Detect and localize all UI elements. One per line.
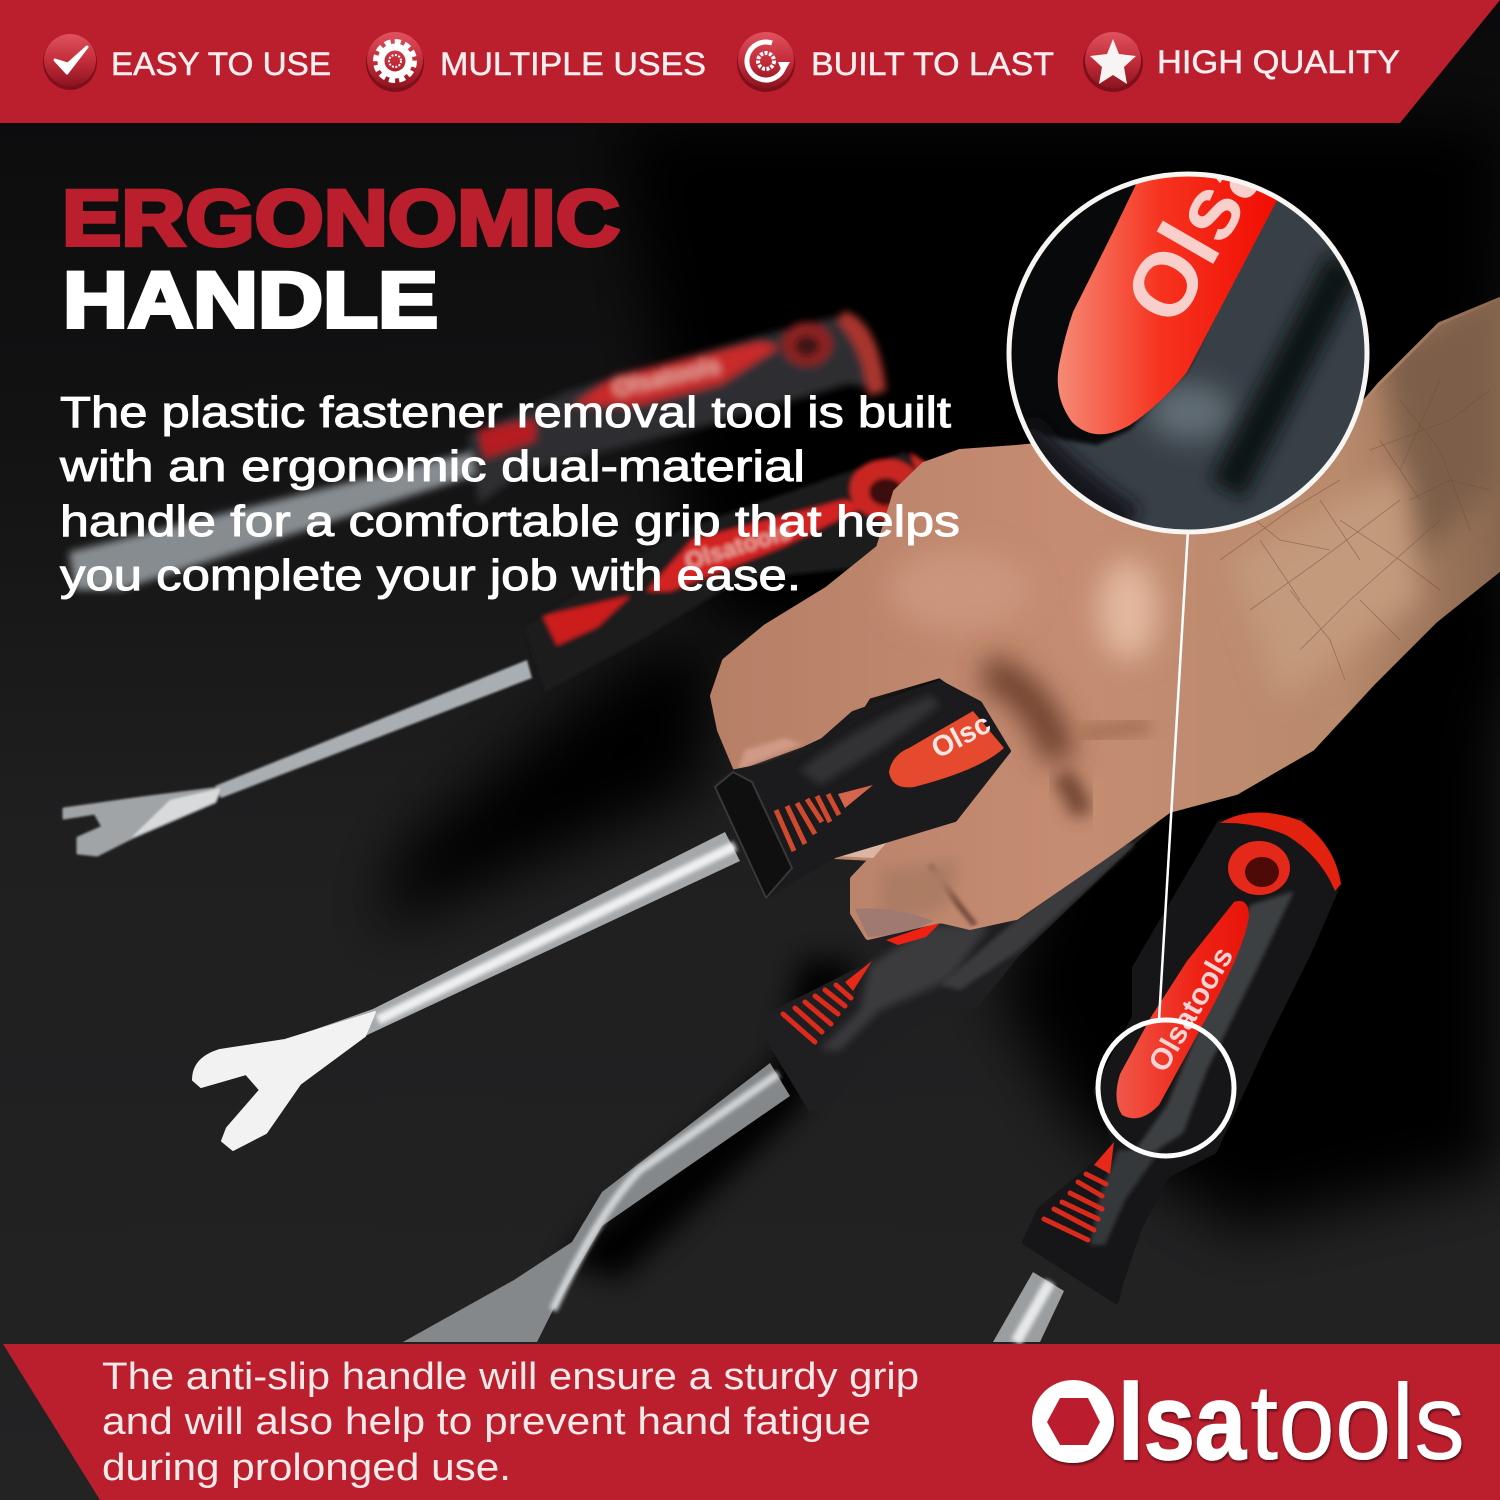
callout small ring: [1098, 1020, 1234, 1156]
body text: with an ergonomic dual-material: [59, 442, 805, 491]
top banner: [0, 0, 1500, 123]
body text: [59, 388, 960, 600]
bottom text: The anti-slip handle will ensure a sturdy grip: [102, 1356, 919, 1398]
hand: [713, 290, 1500, 937]
icon: cycle gear: [737, 32, 795, 92]
grip triangle: [838, 785, 873, 808]
label: built to last: BUILT TO LAST: [811, 46, 1054, 82]
finger tip under handle: [835, 840, 889, 858]
grip ribs: [1044, 1174, 1106, 1240]
blurred tool middle: [64, 452, 935, 855]
grip triangle: [845, 961, 872, 991]
callout magnified grip: [1006, 172, 1370, 534]
icon: star: [1083, 32, 1143, 92]
hanging hole: [1228, 841, 1290, 895]
end dome: [1220, 812, 1341, 891]
callout magnified grip: Olsa: [1106, 120, 1290, 340]
red label oval: [889, 711, 1004, 787]
grip triangle: [1094, 1142, 1114, 1174]
grip ribs: [783, 985, 851, 1042]
tool in hand: [193, 682, 1009, 1150]
blurred tool middle: Olsatools: [682, 518, 794, 576]
icon: gear: [366, 32, 424, 92]
icon: check: [43, 34, 97, 90]
label: multiple uses: MULTIPLE USES: [440, 46, 706, 82]
logo: lsa: [1118, 1361, 1247, 1482]
thumb nail: [855, 908, 934, 937]
grip ribs: [776, 794, 839, 851]
blurred tool top: Olsatools: [610, 352, 723, 403]
heading: [62, 173, 620, 344]
body text: handle for a comfortable grip that helps: [60, 497, 960, 546]
brand text: Olsc: [926, 708, 996, 765]
blurred tool top: [69, 311, 886, 590]
label: high quality: HIGH QUALITY: [1157, 44, 1400, 80]
red accent near thumb: [886, 921, 942, 945]
bottom text: during prolonged use.: [102, 1447, 511, 1489]
logo: [1031, 1361, 1465, 1486]
red label oval: [1116, 901, 1249, 1118]
logo: tools: [1250, 1361, 1465, 1482]
bottom banner: [3, 1344, 1500, 1500]
body text: you complete your job with ease.: [60, 551, 801, 600]
index fingertip: [738, 738, 802, 770]
logo: O: [1031, 1361, 1115, 1486]
heading: HANDLE: [63, 255, 438, 344]
lower tool: [403, 821, 1155, 1342]
bottom text: [102, 1356, 919, 1489]
bottom text: and will also help to prevent hand fatigue: [102, 1401, 871, 1443]
body text: The plastic fastener removal tool is built: [60, 388, 951, 437]
label: easy to use: EASY TO USE: [111, 46, 331, 82]
right tool: [993, 812, 1341, 1342]
brand text: Olsatools: [1142, 941, 1240, 1078]
heading: ERGONOMIC: [62, 173, 620, 262]
callout line: [1159, 530, 1188, 1020]
